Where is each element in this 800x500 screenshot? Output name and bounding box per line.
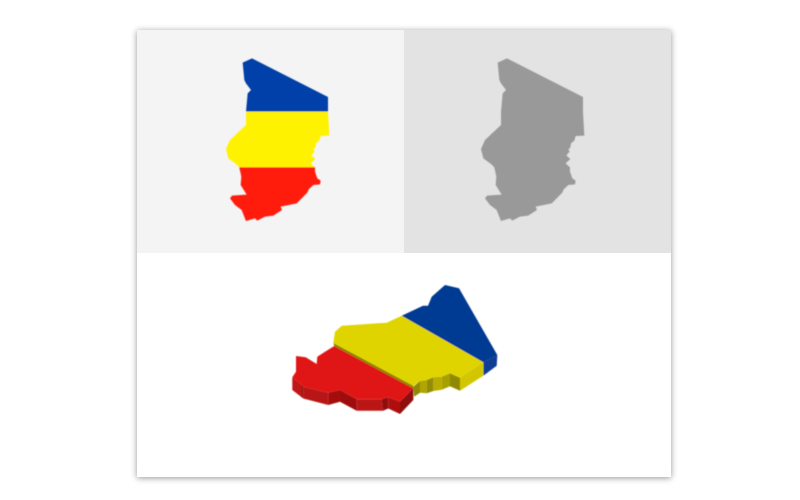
card with shadow — [137, 30, 671, 477]
grey flat map — [481, 58, 584, 221]
panel: flag map background — [137, 30, 404, 253]
map artwork — [137, 30, 671, 415]
yellow top surface — [333, 316, 483, 386]
red top surface — [292, 346, 413, 402]
step between yellow and red — [333, 343, 413, 388]
blue top surface — [402, 285, 497, 362]
flag-coloured flat map — [225, 58, 330, 222]
blue side wall — [483, 355, 497, 376]
yellow side wall — [413, 362, 483, 397]
panel: grey map background — [404, 30, 671, 253]
red side wall — [292, 377, 413, 414]
isometric 3D map — [292, 285, 497, 414]
